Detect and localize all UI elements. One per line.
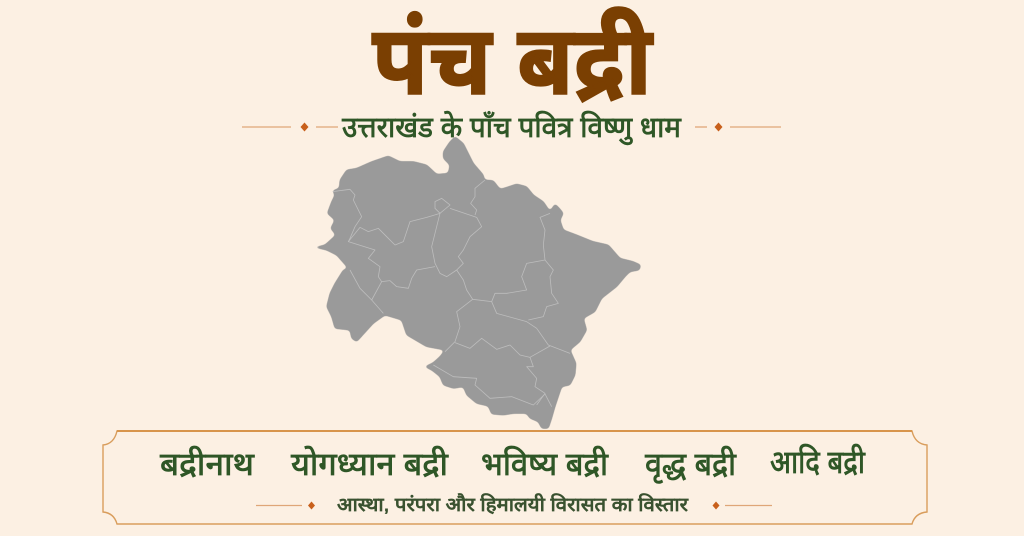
name: Yogadhyan Badri: योगध्यान बद्री [291, 446, 449, 482]
name: Adi Badri: आदि बद्री [770, 444, 866, 480]
panel frame top edge [117, 430, 912, 432]
subtitle: उत्तराखंड के पाँच पवित्र विष्णु धाम [342, 111, 682, 145]
name: Badrinath: बद्रीनाथ [160, 446, 255, 482]
name: Bhavishya Badri: भविष्य बद्री [481, 446, 609, 482]
tagline ornament: left [256, 502, 315, 510]
panel frame [103, 431, 927, 524]
tagline: आस्था, परंपरा और हिमालयी विरासत का विस्तार [337, 494, 689, 516]
subtitle ornament: right [695, 122, 781, 132]
subtitle ornament: left [242, 122, 338, 132]
map of Uttarakhand [315, 137, 641, 428]
district boundaries [333, 180, 570, 407]
title: पंच बद्री [372, 6, 653, 115]
names panel [103, 431, 927, 524]
tagline ornament: right [712, 502, 772, 510]
name: Vriddha Badri: वृद्ध बद्री [645, 446, 737, 484]
state outline [315, 137, 641, 428]
